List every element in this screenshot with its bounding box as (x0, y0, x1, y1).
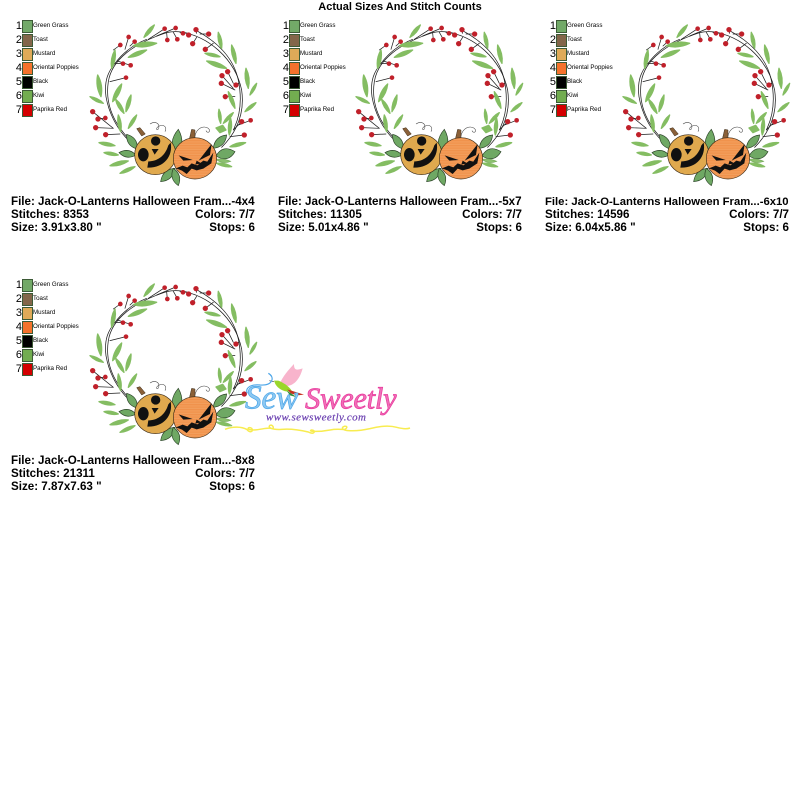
legend: thread colors: Toast (300, 36, 315, 43)
logo text: Sweetly: Sweetly (305, 381, 397, 415)
legend: thread colors: 1 (283, 20, 289, 32)
file stats: File: Jack-O-Lanterns Halloween Fram...-5x7 (278, 195, 522, 208)
legend: thread colors (16, 20, 79, 117)
legend: thread colors: 5 (283, 76, 289, 88)
file stats: Colors: 7/7 (462, 208, 522, 221)
legend: thread colors: Black (33, 78, 48, 85)
legend: thread colors: 7 (550, 104, 556, 116)
file stats: File: Jack-O-Lanterns Halloween Fram...-6x10 (545, 196, 789, 208)
legend: thread colors: Paprika Red (567, 106, 601, 113)
file stats: Stitches: 21311 (11, 467, 95, 480)
legend: thread colors (550, 20, 613, 117)
legend: thread colors: 7 (16, 104, 22, 116)
file stats: Size: 3.91x3.80 " (11, 221, 102, 234)
title: Actual Sizes And Stitch Counts (318, 1, 482, 13)
yellow squiggle (225, 425, 410, 433)
legend: thread colors: Kiwi (300, 92, 311, 99)
legend: thread colors: 5 (16, 76, 22, 88)
wreath with pumpkins (622, 24, 790, 186)
legend: thread colors: 3 (283, 48, 289, 60)
legend: thread colors (16, 279, 79, 376)
legend: thread colors: Mustard (300, 50, 322, 57)
logo swirl (247, 373, 272, 393)
legend: thread colors: Mustard (33, 50, 55, 57)
legend: thread colors: Oriental Poppies (300, 64, 346, 71)
file stats: Stops: 6 (743, 221, 789, 234)
legend: thread colors: 4 (16, 62, 22, 74)
wreath with pumpkins (89, 283, 258, 446)
file stats: Stops: 6 (209, 480, 255, 493)
legend: thread colors: 1 (550, 20, 556, 32)
legend: thread colors: Green Grass (300, 22, 335, 29)
logo text: Sew: Sew (245, 379, 298, 416)
legend: thread colors: Oriental Poppies (33, 64, 79, 71)
legend: thread colors: Black (300, 78, 315, 85)
legend: thread colors: 7 (283, 104, 289, 116)
file stats: File: Jack-O-Lanterns Halloween Fram...-8x8 (11, 454, 255, 467)
file stats (11, 195, 255, 234)
legend: thread colors: Kiwi (567, 92, 578, 99)
file stats: Colors: 7/7 (195, 208, 255, 221)
legend: thread colors: Toast (33, 36, 48, 43)
legend: thread colors: Green Grass (567, 22, 602, 29)
legend: thread colors: Green Grass (33, 281, 68, 288)
legend: thread colors: 1 (16, 279, 22, 291)
file stats: Size: 5.01x4.86 " (278, 221, 369, 234)
file stats: Stops: 6 (209, 221, 255, 234)
legend: thread colors: Toast (567, 36, 582, 43)
legend: thread colors: Kiwi (33, 92, 44, 99)
file stats: Stops: 6 (476, 221, 522, 234)
file stats: File: Jack-O-Lanterns Halloween Fram...-4x4 (11, 195, 255, 208)
icon: hummingbird (269, 364, 304, 397)
legend: thread colors: 5 (550, 76, 556, 88)
legend: thread colors: Kiwi (33, 351, 44, 358)
file stats (11, 454, 255, 493)
file stats: Stitches: 11305 (278, 208, 362, 221)
legend: thread colors: 6 (16, 349, 22, 361)
legend: thread colors: 4 (550, 62, 556, 74)
legend: thread colors: 2 (283, 34, 289, 46)
file stats: Size: 6.04x5.86 " (545, 221, 636, 234)
legend: thread colors: 3 (16, 307, 22, 319)
file stats: Colors: 7/7 (195, 467, 255, 480)
legend: thread colors: Green Grass (33, 22, 68, 29)
legend: thread colors: Paprika Red (33, 106, 67, 113)
legend: thread colors: 5 (16, 335, 22, 347)
panel: 5x7 design (278, 20, 524, 234)
legend: thread colors: 6 (550, 90, 556, 102)
legend: thread colors: 6 (283, 90, 289, 102)
legend: thread colors: 2 (16, 293, 22, 305)
legend: thread colors: Mustard (33, 309, 55, 316)
file stats: Stitches: 14596 (545, 208, 629, 221)
panel: 4x4 design (11, 20, 258, 234)
panel: 6x10 design (545, 20, 790, 234)
legend: thread colors: 4 (283, 62, 289, 74)
wreath with pumpkins (89, 24, 258, 186)
legend: thread colors: 6 (16, 90, 22, 102)
wreath with pumpkins (355, 24, 524, 186)
panel: 8x8 design (11, 279, 258, 493)
legend: thread colors: Oriental Poppies (33, 323, 79, 330)
legend: thread colors: Toast (33, 295, 48, 302)
legend: thread colors: Black (33, 337, 48, 344)
legend: thread colors: Black (567, 78, 582, 85)
logo text: website: www.sewsweetly.com (266, 411, 366, 423)
file stats: Colors: 7/7 (729, 208, 789, 221)
legend: thread colors: Mustard (567, 50, 589, 57)
legend: thread colors: 7 (16, 363, 22, 375)
legend: thread colors: 3 (16, 48, 22, 60)
file stats (545, 196, 789, 234)
legend: thread colors: 3 (550, 48, 556, 60)
file stats: Size: 7.87x7.63 " (11, 480, 102, 493)
legend: thread colors: 2 (550, 34, 556, 46)
file stats: Stitches: 8353 (11, 208, 89, 221)
legend: thread colors: 2 (16, 34, 22, 46)
legend: thread colors: Oriental Poppies (567, 64, 613, 71)
file stats (278, 195, 522, 234)
legend: thread colors: 1 (16, 20, 22, 32)
legend: thread colors: Paprika Red (300, 106, 334, 113)
legend: thread colors: 4 (16, 321, 22, 333)
legend: thread colors: Paprika Red (33, 365, 67, 372)
legend: thread colors (283, 20, 346, 117)
